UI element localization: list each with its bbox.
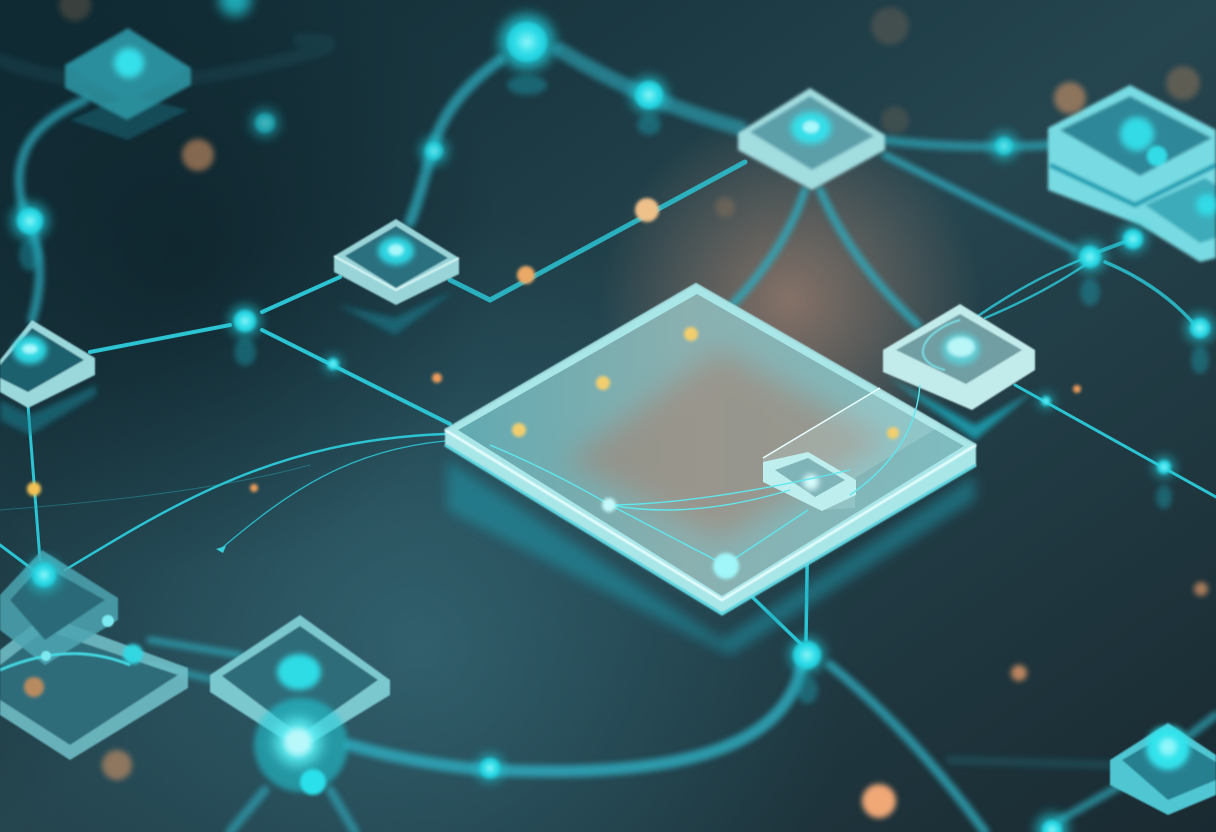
glass block: bottom left bbox=[0, 550, 188, 760]
glass block: top right stack bbox=[1048, 85, 1216, 262]
plate nodes bbox=[602, 498, 616, 512]
plate amber dots bbox=[512, 327, 899, 439]
glass block: top center bbox=[738, 88, 885, 190]
central plate reflection bbox=[447, 460, 975, 655]
central glass plate bbox=[445, 284, 976, 614]
small glass block: top left bbox=[65, 28, 191, 140]
arrow tip of thin trace bbox=[216, 546, 226, 553]
glass block: left bbox=[0, 320, 96, 435]
glowing hub node bbox=[254, 698, 348, 795]
glass block: bottom right bbox=[1110, 723, 1216, 815]
node reflections bbox=[19, 75, 1209, 704]
sharp connectors bbox=[0, 162, 1216, 645]
plate circuit traces bbox=[490, 385, 920, 565]
glass block: bottom center-left bbox=[210, 615, 390, 750]
glass block: upper middle bbox=[334, 219, 459, 335]
glass block: right of plate bbox=[883, 304, 1035, 440]
small glass cube on plate bbox=[763, 388, 942, 511]
